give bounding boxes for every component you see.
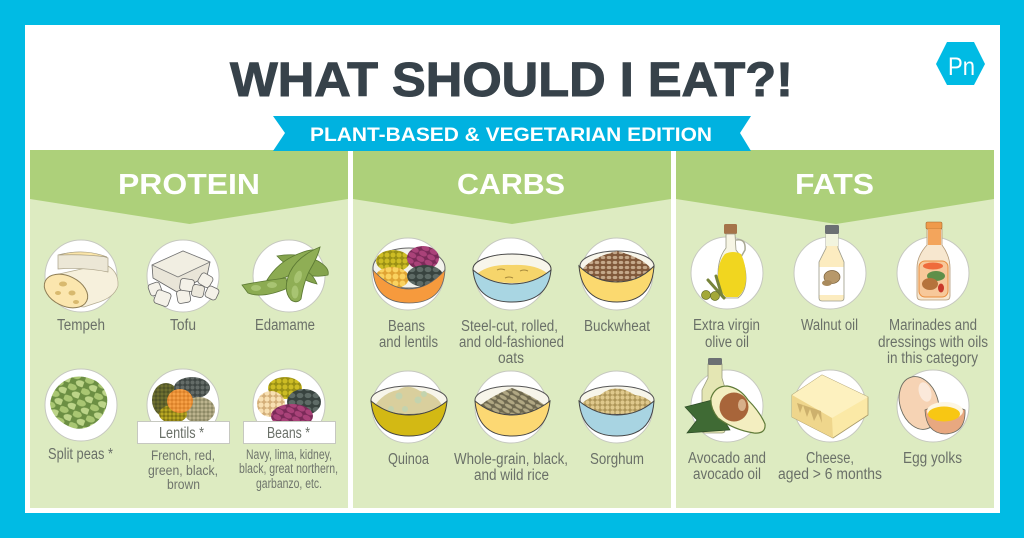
heading: protein: PROTEIN bbox=[118, 169, 260, 201]
label: wild rice bbox=[454, 451, 568, 484]
label: avocado: avocado oil bbox=[693, 466, 761, 483]
label: cheese: Cheese, bbox=[806, 450, 854, 467]
heading: protein bbox=[30, 150, 348, 224]
label: oats: and old-fashioned bbox=[459, 334, 564, 351]
label box: beans: Beans * bbox=[267, 425, 310, 442]
icon: beans bbox=[253, 369, 325, 441]
icon: edamame bbox=[242, 240, 328, 312]
label box: lentils: Lentils * bbox=[159, 425, 204, 442]
icon: quinoa bowl bbox=[371, 371, 447, 443]
label box: beans bbox=[244, 422, 336, 444]
label: beans and lentils bbox=[379, 318, 438, 351]
logo: Pn hexagon bbox=[936, 42, 985, 85]
icon: egg yolks bbox=[893, 370, 969, 442]
label: split peas: Split peas * bbox=[48, 446, 113, 463]
label: cheese: aged > 6 months bbox=[778, 466, 882, 483]
description: lentils: green, black, bbox=[148, 463, 218, 478]
label: avocado: Avocado and bbox=[688, 450, 766, 467]
label: marinades and dressings bbox=[878, 317, 988, 367]
title: WHAT SHOULD I EAT?! bbox=[230, 54, 793, 107]
icon: lentils bbox=[147, 369, 219, 441]
label: egg yolks: Egg yolks bbox=[903, 450, 962, 467]
description: lentils: brown bbox=[167, 477, 200, 492]
icon: tofu bbox=[147, 240, 220, 312]
icon: salad dressing bbox=[897, 222, 969, 309]
subtitle ribbon: PLANT-BASED & VEGETARIAN EDITION bbox=[310, 125, 712, 146]
icon: sorghum bowl bbox=[579, 371, 654, 443]
heading: fats bbox=[676, 150, 994, 224]
description: beans bbox=[239, 447, 338, 491]
label: wild rice: Whole-grain, black, bbox=[454, 451, 568, 468]
label: quinoa: Quinoa bbox=[388, 451, 429, 468]
subtitle ribbon bbox=[273, 116, 751, 151]
description: beans: Navy, lima, kidney, bbox=[246, 447, 332, 462]
description: lentils bbox=[148, 448, 218, 492]
label: beans and lentils: and lentils bbox=[379, 334, 438, 351]
label: cheese bbox=[778, 450, 882, 483]
heading: carbs: CARBS bbox=[457, 169, 565, 201]
label: sorghum: Sorghum bbox=[590, 451, 644, 468]
label: oats: Steel-cut, rolled, bbox=[461, 318, 558, 335]
label: beans and lentils: Beans bbox=[388, 318, 425, 335]
panel: fats bbox=[676, 150, 994, 508]
label: edamame: Edamame bbox=[255, 317, 315, 334]
label: walnut oil: Walnut oil bbox=[801, 317, 858, 334]
description: beans: black, great northern, bbox=[239, 461, 338, 476]
label: wild rice: and wild rice bbox=[474, 467, 549, 484]
label box: lentils bbox=[138, 422, 230, 444]
label: olive oil bbox=[693, 317, 760, 351]
label: olive oil: olive oil bbox=[705, 334, 749, 351]
label: avocado bbox=[688, 450, 766, 483]
panel: carbs bbox=[353, 150, 671, 508]
label: oats: oats bbox=[498, 350, 524, 367]
label: buckwheat: Buckwheat bbox=[584, 318, 651, 335]
icon: cheese bbox=[792, 370, 868, 442]
icon: olive oil bbox=[691, 224, 763, 309]
heading: carbs bbox=[353, 150, 671, 224]
label: marinades and dressings: Marinades and bbox=[889, 317, 977, 334]
icon: buckwheat bowl bbox=[579, 238, 654, 310]
heading: fats: FATS bbox=[795, 169, 874, 201]
label: marinades and dressings: in this category bbox=[887, 350, 978, 367]
description: lentils: French, red, bbox=[151, 448, 215, 463]
icon: wild rice bowl bbox=[475, 371, 550, 443]
icon: walnut oil bbox=[794, 225, 866, 309]
label: olive oil: Extra virgin bbox=[693, 317, 760, 334]
label: tofu: Tofu bbox=[170, 317, 196, 334]
icon: oats bowl bbox=[473, 238, 551, 310]
icon: avocado and oil bbox=[685, 358, 765, 442]
icon: tempeh bbox=[39, 240, 118, 315]
label: marinades and dressings: dressings with oils bbox=[878, 334, 988, 351]
logo: Pn hexagon: Pn bbox=[948, 53, 975, 81]
icon: beans and lentils bowl bbox=[372, 238, 445, 310]
label: oats bbox=[459, 318, 564, 367]
panel: protein bbox=[30, 150, 348, 508]
icon: split peas bbox=[45, 369, 117, 441]
description: beans: garbanzo, etc. bbox=[256, 476, 322, 491]
label: tempeh: Tempeh bbox=[57, 317, 105, 334]
